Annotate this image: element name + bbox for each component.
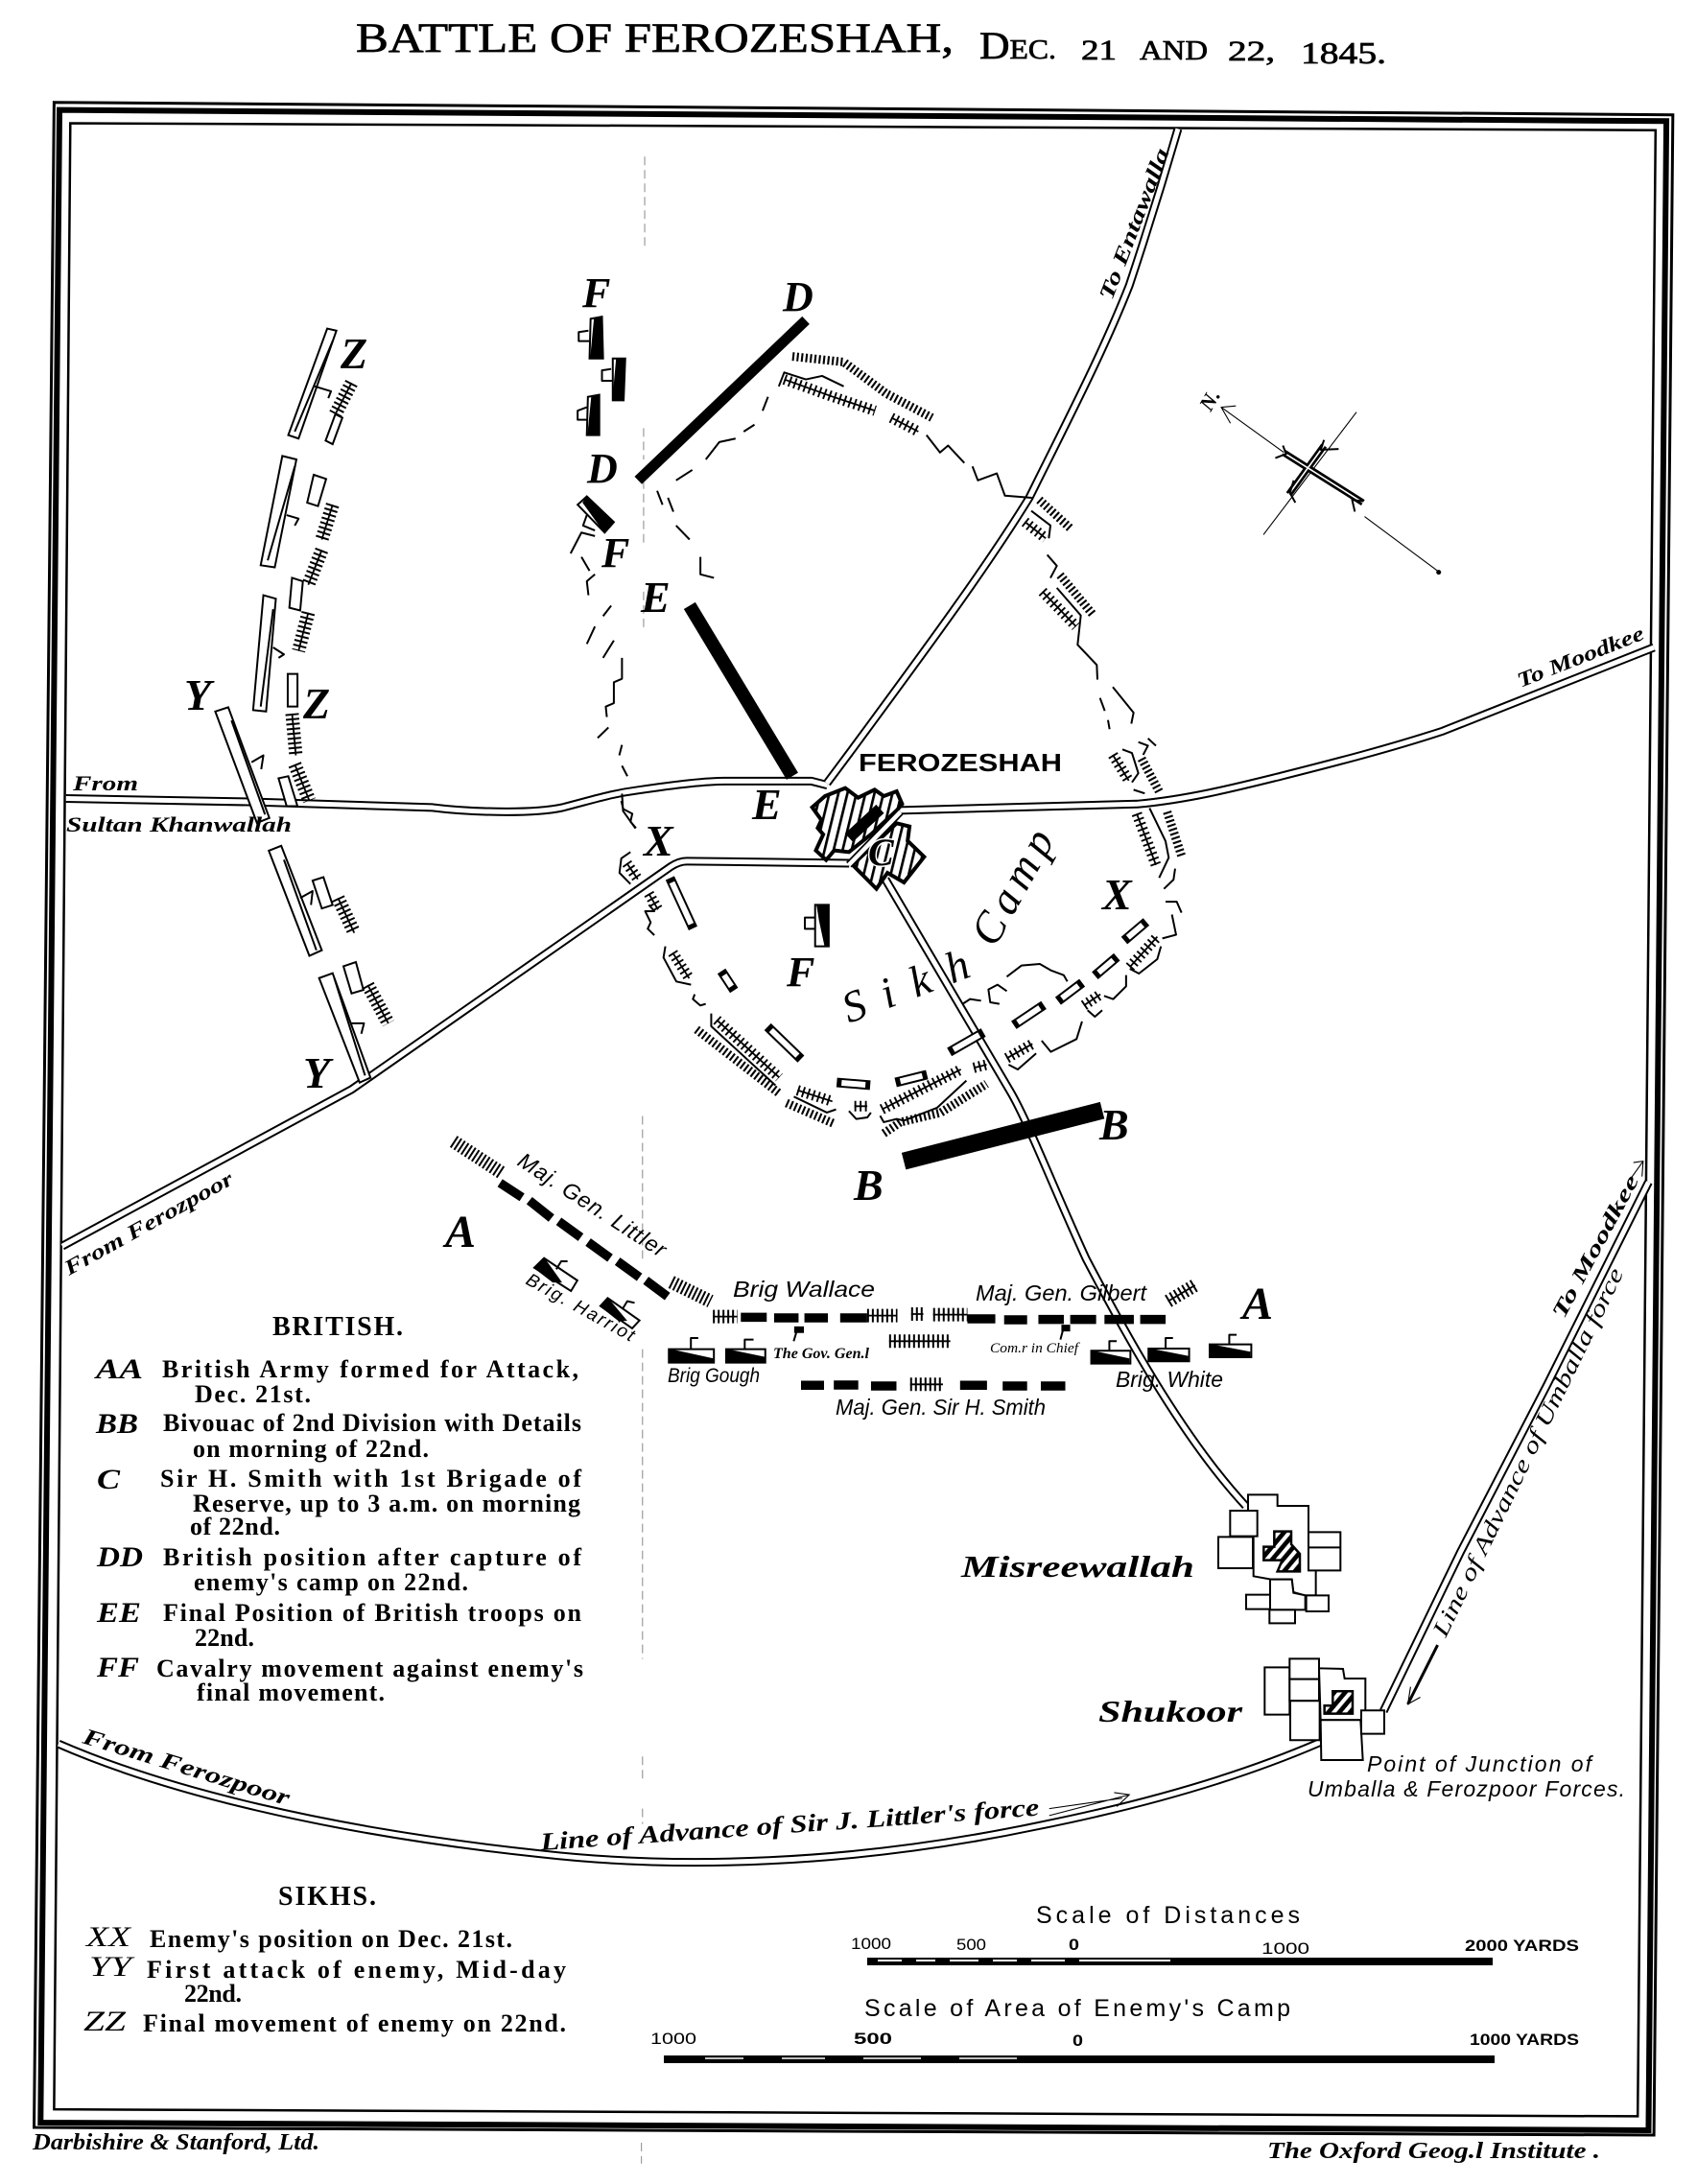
title: BATTLE OF FEROZESHAH,: [356, 16, 954, 61]
entry AA: British Army formed for Attack,: [162, 1355, 578, 1383]
scale numbers: 500: [854, 2030, 892, 2048]
scale numbers: [650, 2030, 1579, 2050]
label: From Ferozpoor upper: From Ferozpoor: [59, 1166, 238, 1280]
position letters: D: [782, 273, 813, 320]
scale of distances: [851, 1902, 1579, 1965]
entry EE: Final Position of British troops on: [163, 1599, 582, 1627]
entrenchment lines south arc: [620, 801, 1161, 1122]
entry DD: DD: [96, 1541, 143, 1573]
position letters: X: [1100, 870, 1133, 919]
label: To Moodkee east: To Moodkee: [1514, 621, 1647, 693]
Sikh and cavalry positions west: [215, 317, 1439, 1162]
position letters: B: [853, 1161, 884, 1209]
compass: [1221, 406, 1439, 573]
label: Com.r in Chief: Com.r in Chief: [990, 1341, 1080, 1356]
scale of area of enemy's camp: [650, 1995, 1579, 2063]
entry YY: 22nd.: [184, 1980, 242, 2008]
position letters: Y: [303, 1048, 334, 1097]
road: to Moodkee: [900, 647, 1654, 810]
scale bar: [867, 1958, 1493, 1965]
road and place names: [59, 145, 1647, 1856]
legend: British: [94, 1312, 583, 1706]
label: Point of Junction: [1308, 1751, 1625, 1801]
entry YY: YY: [89, 1951, 135, 1983]
north guns and hachures: [785, 357, 931, 432]
villages Misreewallah and Shukoor: [1218, 1494, 1384, 1760]
entry BB: Bivouac of 2nd Division with Details: [163, 1409, 581, 1437]
credit: Oxford Geographical Institute: The Oxford Geog.l Institute .: [1267, 2139, 1600, 2164]
entry BB: BB: [95, 1408, 138, 1440]
label: Maj. Gen. Gilbert: Maj. Gen. Gilbert: [976, 1280, 1148, 1305]
cavalry units F north: [577, 317, 625, 532]
junction road between blocks: [849, 812, 901, 865]
position letters: B: [1098, 1100, 1129, 1149]
label: Point of Junction: Point of Junction of: [1367, 1751, 1594, 1776]
title: DEC.: [979, 24, 1056, 67]
scale numbers: 2000 YARDS: [1465, 1937, 1579, 1955]
road: line of advance of Umballa force: [1383, 1182, 1648, 1711]
scale numbers: 1000: [1261, 1939, 1309, 1958]
cavalry unit F: [805, 904, 829, 947]
scale heading: Scale of Area of Enemy's Camp: [864, 1995, 1290, 2022]
position letters: [184, 270, 1273, 1329]
position letters: E: [640, 573, 671, 622]
title: 21: [1081, 35, 1117, 66]
label: From Sultan Khanwallah: Sultan Khanwallah: [66, 812, 292, 836]
scale numbers: 1000: [851, 1935, 891, 1953]
roads: [59, 129, 1654, 1863]
black bar of Sir H. Smith: [849, 809, 880, 837]
entry C: Sir H. Smith with 1st Brigade of: [160, 1465, 581, 1492]
label: Line of Advance of Sir J. Littler's force: Line of Advance of Sir J. Littler's force: [538, 1794, 1040, 1856]
arrow: to Moodkee: [1631, 1162, 1643, 1178]
entry EE: [96, 1597, 582, 1652]
entry C: [97, 1464, 581, 1540]
title: AND: [1140, 35, 1208, 66]
scale numbers: 0: [1072, 2031, 1083, 2050]
label: Shukoor: Shukoor: [1098, 1694, 1243, 1728]
scale numbers: 500: [956, 1936, 986, 1954]
road: from Ferozpoor: [62, 861, 849, 1246]
entry FF: final movement.: [197, 1679, 385, 1706]
entry FF: Cavalry movement against enemy's: [156, 1655, 583, 1682]
entry FF: FF: [96, 1652, 139, 1683]
entry DD: British position after capture of: [163, 1543, 581, 1571]
label: Sikh Camp: Camp: [960, 820, 1064, 953]
entry XX: XX: [85, 1921, 132, 1953]
Governor General flag: [793, 1327, 804, 1341]
entry XX: Enemy's position on Dec. 21st.: [150, 1925, 512, 1953]
entry FF: [96, 1652, 583, 1706]
British bar EE: [690, 605, 792, 776]
label: From Sultan Khanwallah: From: [72, 771, 138, 795]
entry YY: First attack of enemy, Mid-day: [147, 1956, 566, 1984]
label: The Gov. Gen.: The Gov. Gen.l: [773, 1346, 870, 1362]
scale heading: Scale of Distances: [1036, 1902, 1300, 1929]
Harriot brigade: [534, 1258, 640, 1328]
label: Sikh Camp: [835, 820, 1064, 1032]
position letters: A: [1239, 1279, 1273, 1329]
scale numbers: 1000: [650, 2030, 696, 2048]
Commander in Chief flag: [1060, 1326, 1070, 1340]
label: Brig Gough: Brig Gough: [668, 1365, 760, 1387]
entry C: C: [97, 1464, 121, 1495]
entry AA: AA: [94, 1353, 143, 1385]
Sikh bars, hollow: [672, 882, 1143, 1085]
label: Misreewallah: Misreewallah: [960, 1549, 1194, 1584]
entry YY: [89, 1951, 566, 2008]
Sikh guns south arc: [626, 863, 1157, 1134]
legend: Sikhs: [83, 1882, 566, 2037]
label: Point of Junction: Umballa & Ferozpoor Forces.: [1308, 1776, 1625, 1801]
label: Maj. Gen. Littler: Maj. Gen. Littler: [513, 1147, 672, 1262]
camp north and west: [571, 357, 1032, 829]
scale numbers: 1000 YARDS: [1470, 2031, 1579, 2049]
entry C: Reserve, up to 3 a.m. on morning: [193, 1490, 580, 1517]
British army formation AA: [454, 1141, 1251, 1386]
title: 22,: [1228, 35, 1275, 67]
Z line: [253, 329, 351, 806]
label: To Entawalla: To Entawalla: [1094, 145, 1174, 303]
road: line of advance of Littler: [59, 1743, 1320, 1863]
position letters: C: [868, 831, 895, 874]
east entrenchment lines: [1031, 511, 1182, 938]
position letters: F: [601, 529, 629, 576]
village: Ferozeshah and camp south: [620, 788, 1161, 1134]
label: FEROZESHAH: FEROZESHAH: [859, 748, 1062, 777]
village: Shukoor: [1264, 1658, 1384, 1760]
label: Maj. Gen. Sir H. Smith: Maj. Gen. Sir H. Smith: [836, 1395, 1046, 1420]
entry DD: enemy's camp on 22nd.: [194, 1568, 468, 1596]
entry EE: 22nd.: [195, 1624, 254, 1652]
White brigade: [1092, 1335, 1251, 1364]
village south block: [853, 823, 924, 889]
title: 1845.: [1301, 35, 1386, 70]
road: south to Misreewallah: [885, 880, 1245, 1506]
Wallace and Gilbert line: [713, 1285, 1195, 1384]
label: Sikh Camp: Sikh: [835, 939, 976, 1032]
camp east: [1025, 500, 1182, 938]
east guns and hachures: [1025, 500, 1182, 865]
position letters: F: [786, 949, 814, 996]
entry AA: [94, 1353, 578, 1408]
position letters: Z: [340, 329, 367, 378]
position letters: D: [586, 445, 618, 492]
entry BB: on morning of 22nd.: [193, 1435, 429, 1463]
British bar DD: [638, 320, 806, 481]
village north block: [813, 788, 902, 860]
entry ZZ: Final movement of enemy on 22nd.: [143, 2009, 566, 2037]
entry DD: [96, 1541, 581, 1596]
entrenchment north: [571, 372, 1032, 829]
label: From Sultan Khanwallah: [66, 771, 292, 836]
credit: Darbishire & Stanford: Darbishire & Stanford, Ltd.: [32, 2130, 319, 2155]
arrow: Littler advance: [1049, 1793, 1129, 1816]
Y line: [215, 707, 389, 1083]
entry C: of 22nd.: [190, 1513, 280, 1540]
position letters: A: [442, 1207, 476, 1257]
scale numbers: 0: [1069, 1936, 1079, 1954]
British bar BB: [904, 1111, 1102, 1162]
Smith line: [801, 1380, 1066, 1391]
position letters: X: [642, 816, 674, 865]
position letters: Y: [184, 670, 215, 719]
village: Misreewallah: [1218, 1494, 1340, 1623]
road: from Sultan Khanwallah: [66, 781, 828, 811]
label: From Ferozpoor lower: From Ferozpoor: [79, 1724, 294, 1811]
position letters: E: [751, 780, 782, 829]
label: To Moodkee south east: To Moodkee: [1546, 1170, 1644, 1322]
scale numbers: [851, 1935, 1579, 1958]
entry EE: EE: [96, 1597, 141, 1629]
label: Brig Wallace: Brig Wallace: [733, 1277, 875, 1302]
label: compass N: N.: [1193, 385, 1225, 415]
road: to Entawalla: [827, 129, 1178, 784]
label: Brig. Harriot: Brig. Harriot: [523, 1270, 639, 1347]
entry BB: [95, 1408, 581, 1463]
heading: British: BRITISH.: [272, 1312, 403, 1342]
label: Brig. White: Brig. White: [1116, 1367, 1223, 1392]
scale bar: [664, 2055, 1495, 2063]
entry ZZ: ZZ: [83, 2006, 126, 2037]
position letters: Z: [302, 679, 330, 728]
arrow: Umballa advance: [1408, 1645, 1438, 1704]
position letters: F: [581, 270, 610, 317]
Littler column: [454, 1141, 711, 1302]
Gough brigade: [669, 1338, 766, 1363]
title: [356, 16, 1386, 70]
entry AA: Dec. 21st.: [195, 1380, 311, 1408]
label: Line of Advance of Umballa force: Line of Advance of Umballa force: [1427, 1264, 1629, 1642]
heading: Sikhs: SIKHS.: [278, 1882, 376, 1912]
